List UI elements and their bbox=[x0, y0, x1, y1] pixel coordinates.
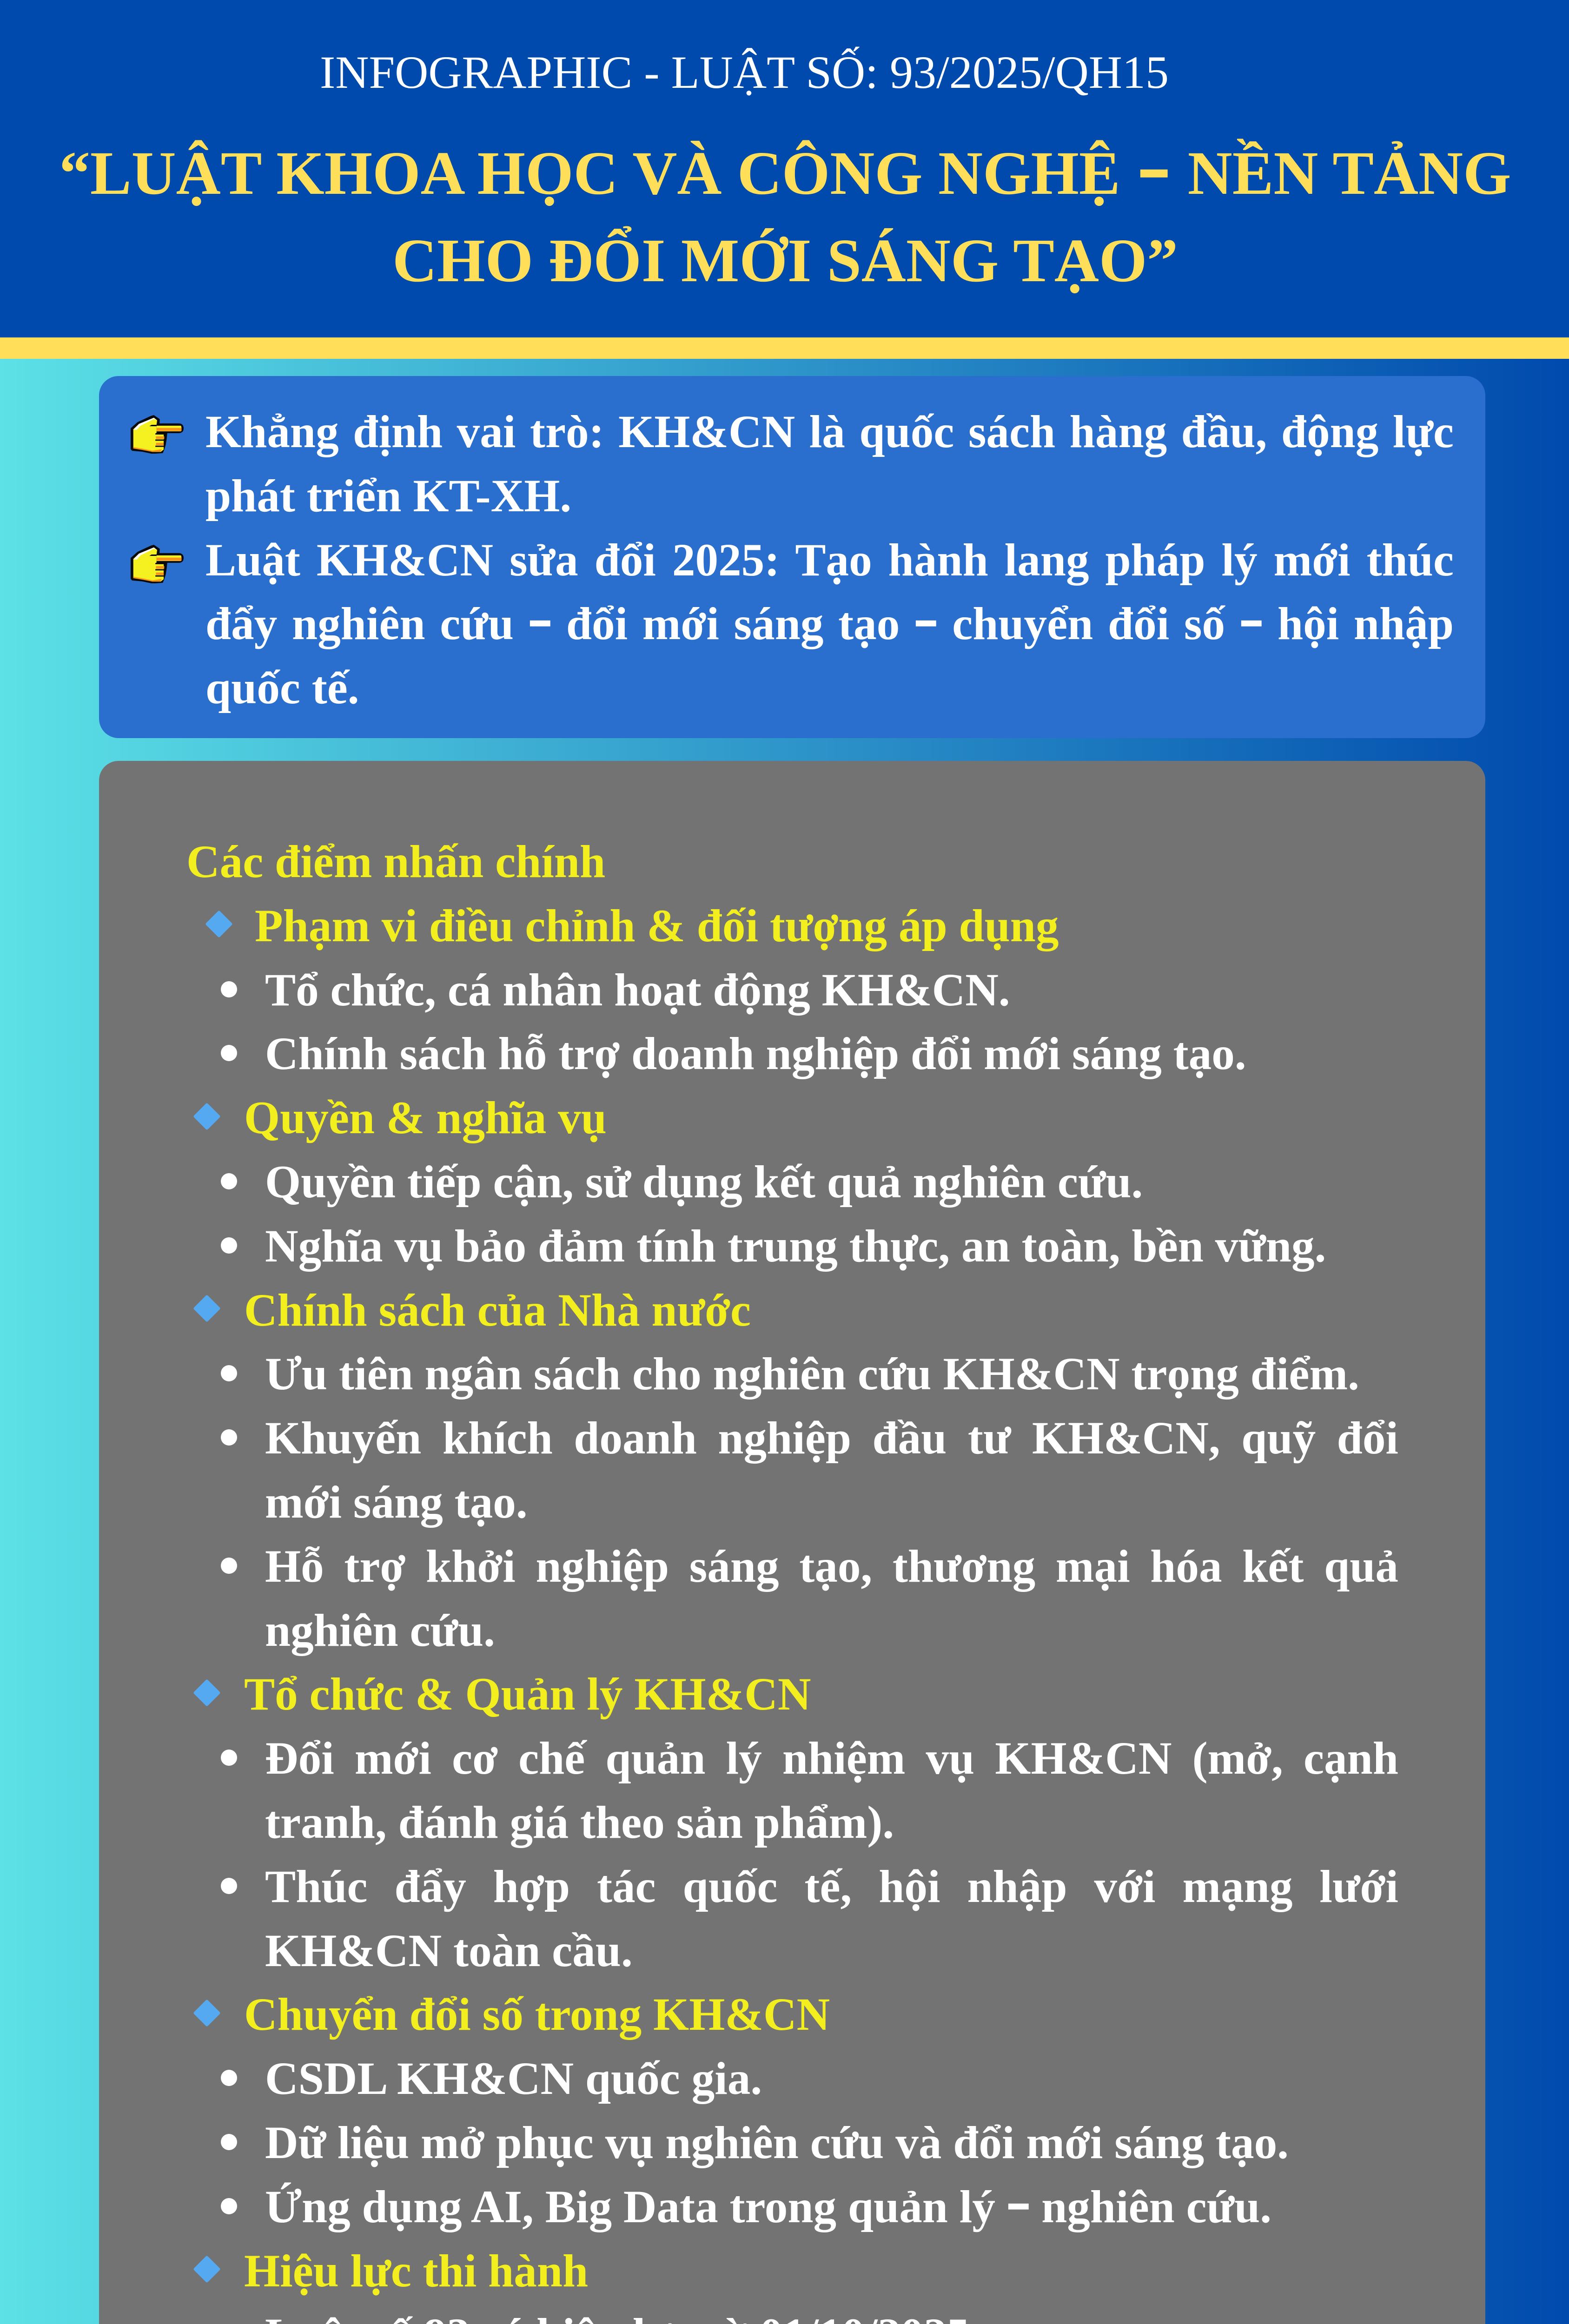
section: organisation and management: Tổ chức & Quản lý KH&CN bbox=[244, 1669, 811, 1720]
section: digital transformation: Chuyển đổi số trong KH&CN bbox=[244, 1989, 830, 2040]
section: scope bbox=[186, 894, 1398, 1086]
yellow divider band bbox=[0, 337, 1569, 359]
law number line: INFOGRAPHIC - LUẬT SỐ: 93/2025/QH15 bbox=[320, 46, 1169, 98]
section: rights and duties: Nghĩa vụ bảo đảm tính trung thực, an toàn, bền vững. bbox=[265, 1221, 1326, 1272]
panel: key points background bbox=[99, 761, 1485, 2324]
icon: pointing hand 2 bbox=[131, 545, 184, 583]
section: scope: Tổ chức, cá nhân hoạt động KH&CN. bbox=[265, 965, 1010, 1016]
title: CHO ĐỔI MỚI SÁNG TẠO” bbox=[392, 226, 1178, 295]
section: state policy: Ưu tiên ngân sách cho nghiên cứu KH&CN trọng điểm. bbox=[265, 1349, 1359, 1400]
section: state policy: Hỗ trợ khởi nghiệp sáng tạo, thương mại hóa kết quả bbox=[265, 1541, 1398, 1592]
icon: pointing hand 1 bbox=[131, 415, 184, 454]
section: digital transformation: Dữ liệu mở phục vụ nghiên cứu và đổi mới sáng tạo. bbox=[265, 2118, 1289, 2168]
intro text line 2: phát triển KT-XH. bbox=[205, 471, 571, 522]
section: organisation and management: tranh, đánh giá theo sản phẩm). bbox=[265, 1797, 894, 1848]
section: digital transformation: CSDL KH&CN quốc gia. bbox=[265, 2053, 762, 2104]
section: organisation and management: KH&CN toàn cầu. bbox=[265, 1926, 633, 1976]
section: state policy: Chính sách của Nhà nước bbox=[244, 1285, 751, 1336]
section: state policy bbox=[186, 1279, 1398, 1663]
section: organisation and management bbox=[186, 1663, 1398, 1983]
intro text line 3: Luật KH&CN sửa đổi 2025: Tạo hành lang pháp lý mới thúc bbox=[205, 535, 1454, 586]
section: rights and duties bbox=[186, 1086, 1398, 1279]
title: “LUẬT KHOA HỌC VÀ CÔNG NGHỆ NỀN TẢNG bbox=[59, 139, 1511, 207]
section: effect: Hiệu lực thi hành bbox=[244, 2246, 588, 2297]
section: state policy: mới sáng tạo. bbox=[265, 1477, 528, 1528]
intro text line 4: – bbox=[916, 568, 936, 662]
intro text line 1: Khẳng định vai trò: KH&CN là quốc sách hàng đầu, động lực bbox=[205, 407, 1454, 457]
section: effect bbox=[186, 2239, 1398, 2324]
section: digital transformation bbox=[186, 1983, 1398, 2239]
section: digital transformation: – bbox=[1008, 2152, 1028, 2245]
section: rights and duties: Quyền & nghĩa vụ bbox=[244, 1093, 607, 1143]
section: digital transformation: Ứng dụng AI, Big Data trong quản lý nghiên cứu. bbox=[265, 2182, 1271, 2232]
section: scope: Phạm vi điều chỉnh & đối tượng áp dụng bbox=[255, 901, 1059, 951]
section: scope: Chính sách hỗ trợ doanh nghiệp đổi mới sáng tạo. bbox=[265, 1029, 1246, 1079]
title: – bbox=[1141, 98, 1167, 225]
intro text line 4: – bbox=[1241, 568, 1261, 662]
section: state policy: nghiên cứu. bbox=[265, 1605, 495, 1656]
section: organisation and management: Thúc đẩy hợp tác quốc tế, hội nhập với mạng lưới bbox=[265, 1862, 1398, 1912]
title bbox=[0, 129, 1569, 304]
panel: introduction background bbox=[99, 376, 1485, 738]
intro text line 4: đẩy nghiên cứu đổi mới sáng tạo chuyển đổi số hội nhập bbox=[205, 599, 1454, 649]
section: state policy: Khuyến khích doanh nghiệp đầu tư KH&CN, quỹ đổi bbox=[265, 1413, 1398, 1464]
intro text line 5: quốc tế. bbox=[205, 663, 359, 713]
intro text line 4: – bbox=[530, 568, 550, 662]
section: rights and duties: Quyền tiếp cận, sử dụng kết quả nghiên cứu. bbox=[265, 1157, 1143, 1208]
section: organisation and management: Đổi mới cơ chế quản lý nhiệm vụ KH&CN (mở, cạnh bbox=[265, 1733, 1398, 1784]
header background bbox=[0, 0, 1569, 337]
heading: key points: Các điểm nhấn chính bbox=[186, 837, 605, 887]
